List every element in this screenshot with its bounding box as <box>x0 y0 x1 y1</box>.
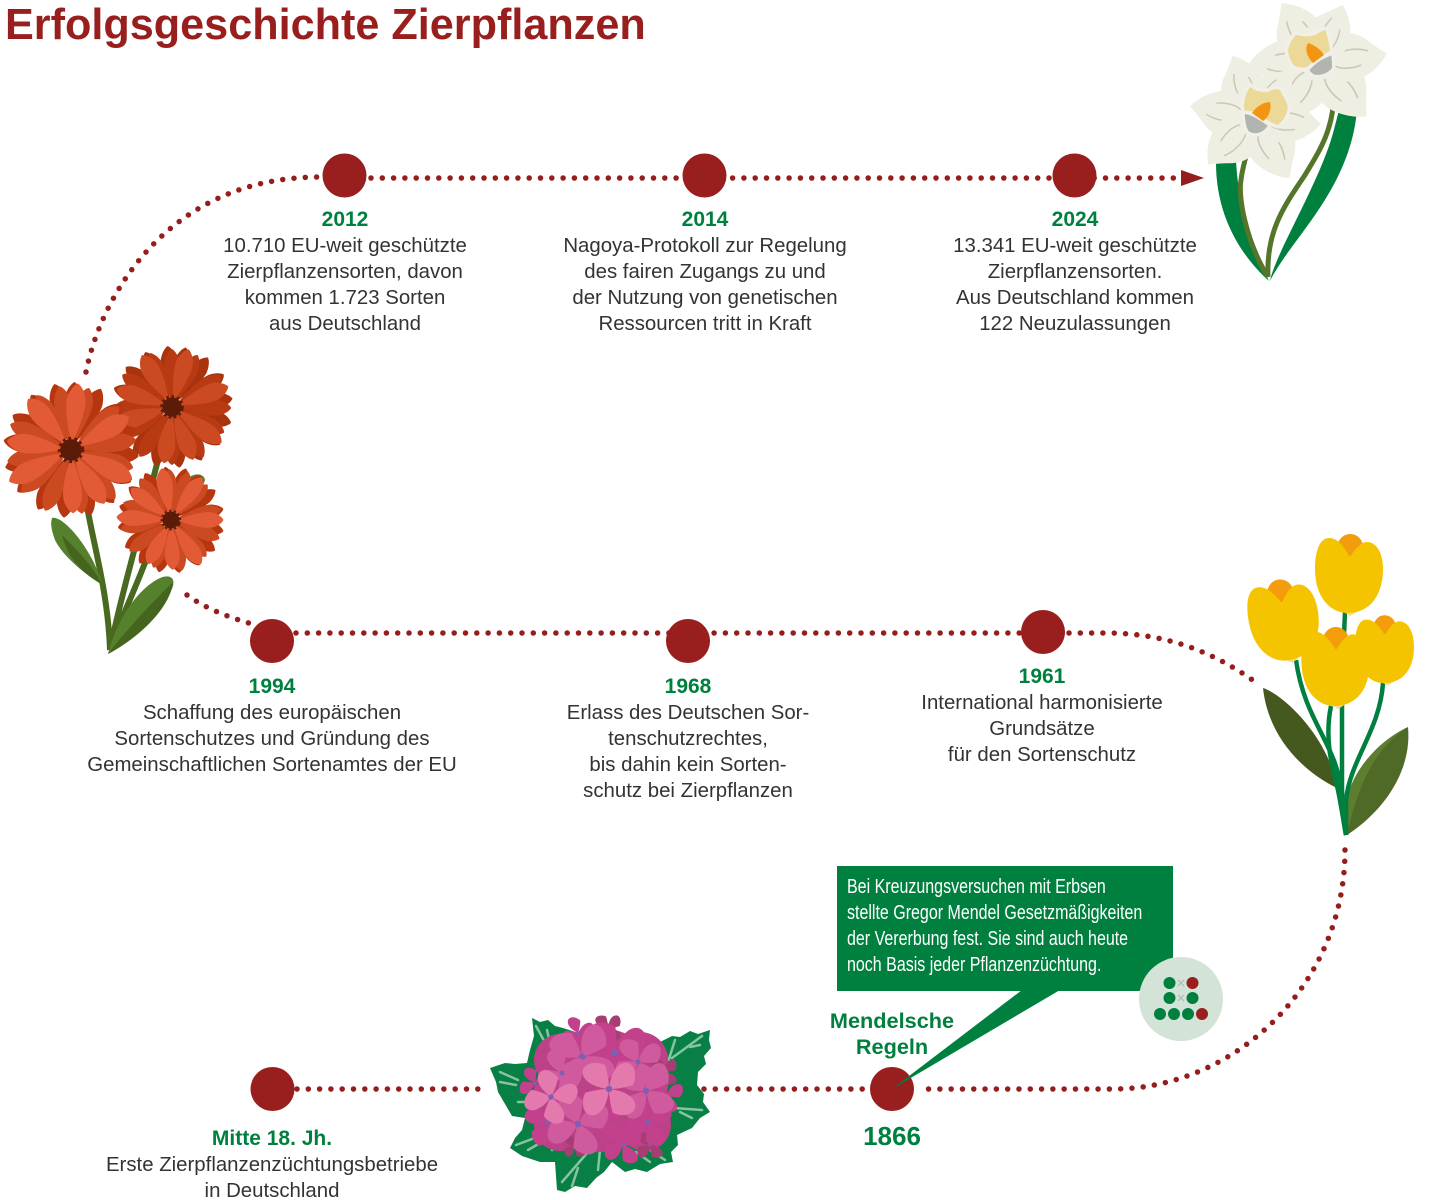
arrow head <box>1181 170 1204 186</box>
node 2012 <box>322 154 366 198</box>
label: Mendelsche Regeln: Regeln <box>856 1034 928 1059</box>
text: 2014: der Nutzung von genetischen <box>572 287 838 309</box>
illustration: gerbera <box>0 337 244 654</box>
narcissus cup, rear <box>1286 28 1334 77</box>
gerbera stems <box>85 460 158 650</box>
tulip, top <box>1315 534 1383 616</box>
text: 1968 <box>567 675 809 802</box>
label: 1866: 1866 <box>863 1121 921 1151</box>
text: 2014: 2014 <box>682 208 728 231</box>
text: 1968: tenschutzrechtes, <box>608 728 768 750</box>
illustration: narcissus <box>1186 0 1403 281</box>
narcissus bloom, front <box>1186 48 1323 190</box>
text: 2024: 2024 <box>1052 208 1098 231</box>
dotted timeline: middle row <box>187 595 1254 681</box>
gerbera bloom, top <box>102 337 242 477</box>
gerbera bloom, left <box>0 379 142 521</box>
text: 1961: für den Sortenschutz <box>948 744 1136 766</box>
gerbera leaves <box>51 474 205 654</box>
node Mitte 18. Jh. <box>250 1067 294 1111</box>
hydrangea leaf veins <box>500 1026 702 1186</box>
hydrangea florets, medium <box>518 1015 685 1165</box>
text: 2024: 13.341 EU-weit geschützte <box>953 235 1197 257</box>
text: Mitte 18. Jh. <box>106 1127 438 1200</box>
text: 2014: des fairen Zugangs zu und <box>584 261 826 283</box>
illustration: tulips <box>1242 534 1416 835</box>
text: 2024 <box>953 208 1197 335</box>
narcissus leaves <box>1216 86 1357 281</box>
gerbera bloom, small <box>98 447 244 593</box>
text: 2012: 10.710 EU-weit geschützte <box>223 235 467 257</box>
narcissus cup, front <box>1242 85 1289 135</box>
text: 2014 <box>563 208 847 335</box>
label: Mendelsche Regeln <box>830 1008 954 1059</box>
node 1968 <box>666 619 710 663</box>
hydrangea leaves <box>490 1018 711 1192</box>
node 1866 <box>870 1067 914 1111</box>
dotted timeline: bottom row <box>297 850 1345 1089</box>
hydrangea florets, dark <box>564 1015 677 1158</box>
text: 1961 <box>921 665 1163 766</box>
narcissus bloom, rear <box>1232 0 1403 151</box>
node 2024 <box>1052 154 1096 198</box>
text: 1968: 1968 <box>665 675 711 698</box>
tulip, middle <box>1300 626 1371 710</box>
text: 2012 <box>223 208 467 335</box>
text: 2012: aus Deutschland <box>269 313 421 335</box>
text: 1961: Grundsätze <box>989 718 1095 740</box>
icon: Mendel inheritance diagram <box>1139 957 1223 1041</box>
text: Mitte 18. Jh.: Erste Zierpflanzenzüchtungsbetriebe <box>106 1154 438 1176</box>
text: 1968: Erlass des Deutschen Sor- <box>567 702 809 724</box>
text: Mitte 18. Jh.: Mitte 18. Jh. <box>212 1127 332 1150</box>
callout text: der Vererbung fest. Sie sind auch heute <box>847 928 1128 950</box>
title: Erfolgsgeschichte Zierpflanzen <box>5 1 646 49</box>
text: 1968: bis dahin kein Sorten- <box>589 754 787 776</box>
callout text: stellte Gregor Mendel Gesetzmäßigkeiten <box>847 902 1142 924</box>
text: 1994 <box>87 675 457 776</box>
text: 1994: 1994 <box>249 675 295 698</box>
hydrangea florets, light <box>536 1022 675 1158</box>
tulip, left <box>1242 574 1326 669</box>
text: 2014: Nagoya-Protokoll zur Regelung <box>563 235 847 257</box>
callout box <box>837 866 1173 991</box>
callout text: noch Basis jeder Pflanzenzüchtung. <box>847 954 1101 976</box>
text: 1994: Gemeinschaftlichen Sortenamtes der EU <box>87 754 457 776</box>
tulip leaves <box>1263 688 1408 835</box>
text: 1961: 1961 <box>1019 665 1065 688</box>
dotted timeline: top row <box>86 177 1178 372</box>
hydrangea base <box>534 1028 671 1152</box>
node 1961 <box>1021 610 1065 654</box>
callout pointer <box>892 990 1060 1089</box>
narcissus stems <box>1240 95 1334 277</box>
text: 2014: Ressourcen tritt in Kraft <box>598 313 812 335</box>
label: Mendelsche Regeln: Mendelsche <box>830 1008 954 1033</box>
text: 2012: 2012 <box>322 208 368 231</box>
text: 2024: Aus Deutschland kommen <box>956 287 1194 309</box>
text: 1968: schutz bei Zierpflanzen <box>583 780 793 802</box>
text: 2024: 122 Neuzulassungen <box>979 313 1171 335</box>
text: 1994: Sortenschutzes und Gründung des <box>114 728 430 750</box>
text: 1994: Schaffung des europäischen <box>143 702 401 724</box>
tulip stems <box>1296 612 1383 835</box>
text: 2024: Zierpflanzensorten. <box>988 261 1162 283</box>
node 2014 <box>682 154 726 198</box>
illustration: hydrangea <box>490 1015 711 1192</box>
text: 2012: kommen 1.723 Sorten <box>245 287 445 309</box>
callout text <box>847 876 1142 976</box>
text: 1961: International harmonisierte <box>921 692 1163 714</box>
text: 2012: Zierpflanzensorten, davon <box>227 261 463 283</box>
node 1994 <box>250 619 294 663</box>
hydrangea florets, lightest <box>521 1063 635 1127</box>
callout text: Bei Kreuzungsversuchen mit Erbsen <box>847 876 1106 898</box>
tulip, right <box>1354 614 1416 687</box>
